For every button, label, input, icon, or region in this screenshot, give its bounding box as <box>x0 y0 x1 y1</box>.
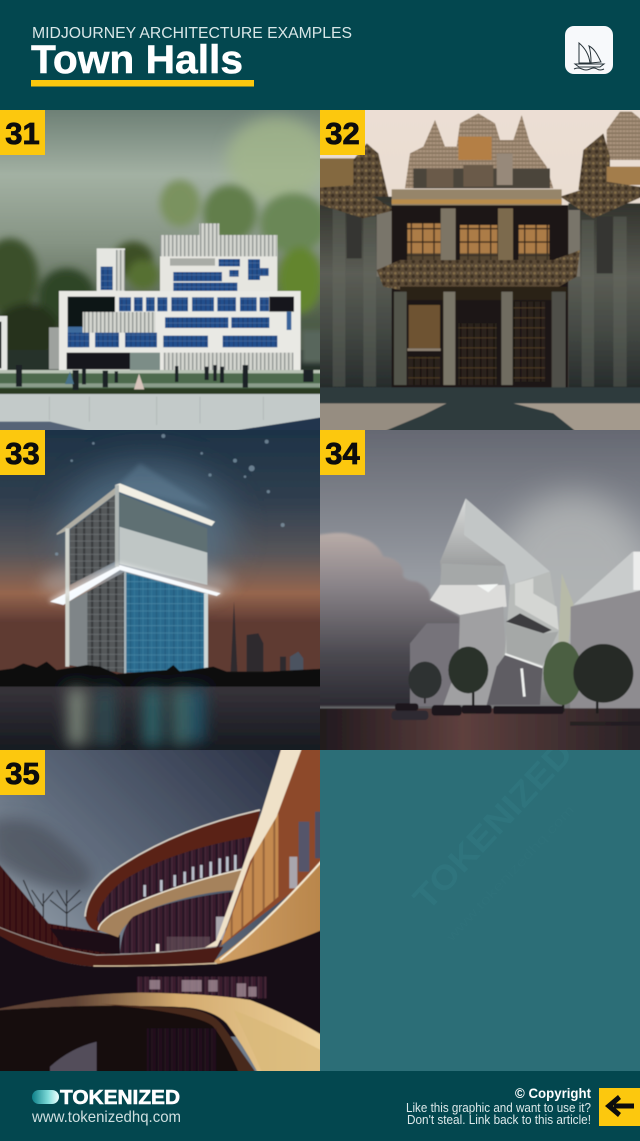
dark ground storey <box>0 927 330 1037</box>
panel 36: empty teal tile with watermark: TOKENIZED <box>406 734 580 917</box>
website url: www.tokenizedhq.com <box>31 1109 181 1126</box>
reflecting pool <box>0 1006 263 1083</box>
number badge 35 <box>0 750 45 795</box>
panel 34: white faceted building <box>320 430 640 750</box>
stars <box>55 434 285 556</box>
panel 31: white modular town hall <box>0 110 320 430</box>
copyright notice <box>406 1085 591 1127</box>
parked cars <box>392 703 563 720</box>
number badge 33: 33 <box>5 436 40 471</box>
copyright notice: Don't steal. Link back to this article! <box>407 1113 591 1127</box>
bare trees <box>23 880 82 927</box>
number badge 31 <box>0 110 45 155</box>
panel 36: empty teal tile with watermark: www.tokenizedhq.com <box>442 802 577 945</box>
towers on roof <box>310 112 640 203</box>
shoreline <box>0 662 330 688</box>
subtitle: MIDJOURNEY ARCHITECTURE EXAMPLES <box>32 25 352 42</box>
number badge 35: 35 <box>5 756 40 791</box>
cantilever soffit <box>213 852 330 965</box>
forecourt <box>310 387 640 440</box>
copyright notice: Like this graphic and want to use it? <box>406 1101 591 1115</box>
carved balcony <box>377 250 580 290</box>
panel 32: ornate dark palace facade <box>320 110 640 430</box>
facets building <box>410 498 640 710</box>
cloud <box>310 533 460 707</box>
title: Town Halls <box>31 38 243 82</box>
header band <box>0 0 640 110</box>
side walls <box>310 197 400 388</box>
upper curved storeys <box>85 810 260 932</box>
number badge 34: 34 <box>325 436 360 471</box>
trees <box>408 642 633 713</box>
panel 33: glass tower at dusk <box>0 430 320 750</box>
title underline <box>31 80 254 86</box>
footer band <box>0 1071 640 1141</box>
central facade <box>392 205 568 388</box>
building <box>49 223 301 371</box>
neighbouring wall <box>0 316 7 371</box>
logo: Tokenized: TOKENIZED <box>60 1086 180 1109</box>
number badge 33 <box>0 430 45 475</box>
copyright notice: © Copyright <box>515 1085 591 1101</box>
right wing: red volume and fins <box>220 740 330 947</box>
number badge 31: 31 <box>5 116 40 151</box>
panel 36: empty teal tile with watermark <box>320 734 640 1071</box>
number badge 32 <box>320 110 365 155</box>
lower balustrade band <box>0 923 223 967</box>
number badge 34 <box>320 430 365 475</box>
icon: Midjourney sailboat <box>565 26 613 74</box>
left wing <box>0 853 120 957</box>
distant skyline <box>231 602 303 672</box>
ground storey <box>409 305 440 348</box>
people <box>16 365 313 390</box>
timber deck <box>0 993 330 1083</box>
ornate overhangs <box>310 182 640 218</box>
lawn and wall <box>0 371 330 393</box>
panel 35: curved timber and red building <box>0 750 320 1071</box>
water <box>0 687 330 760</box>
number badge 32: 32 <box>325 116 360 151</box>
tower <box>50 483 221 673</box>
ground <box>310 708 640 760</box>
back arrow button <box>599 1088 640 1126</box>
